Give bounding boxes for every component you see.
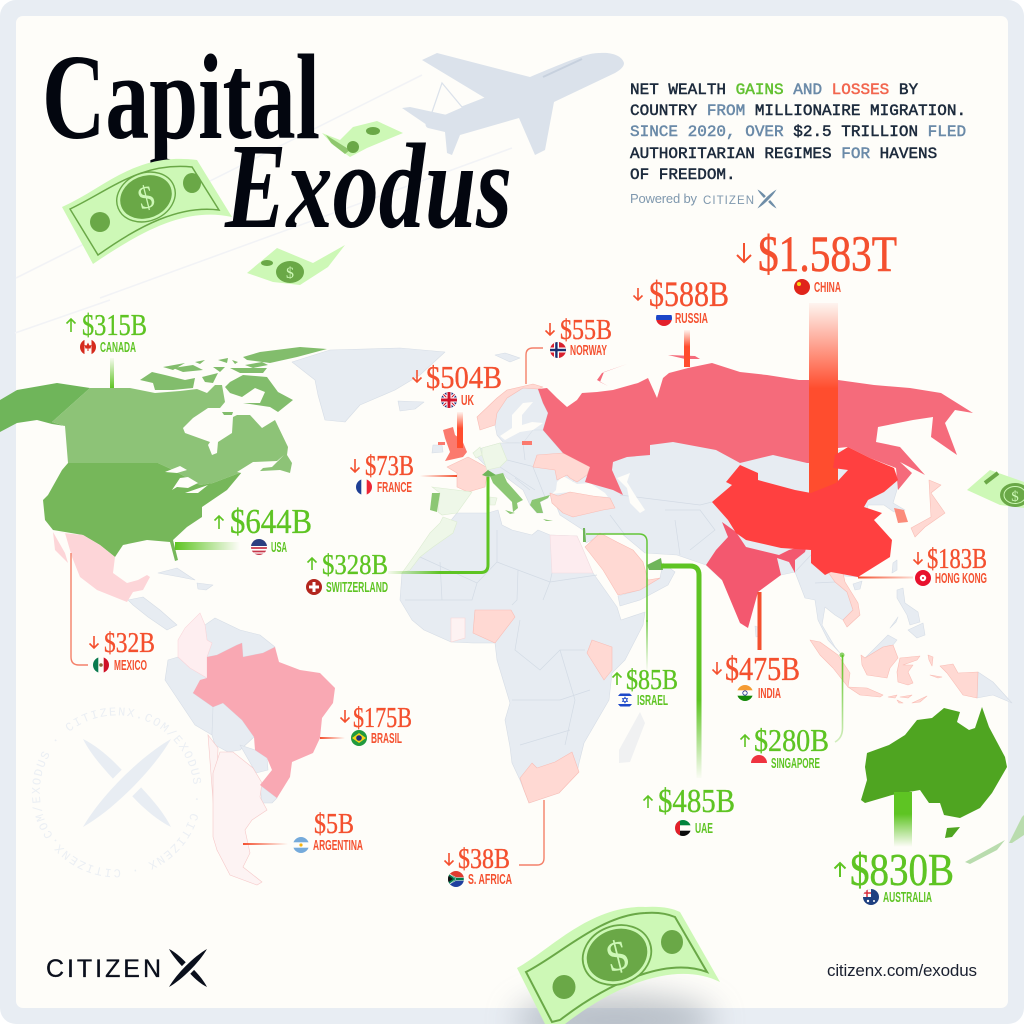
watermark: citizenx seal: CITIZENX.COM/EXODUS · CITIZENX · CITIZENX.COM/EXODUS ·: [32, 708, 201, 878]
label: Australia: $830B: [850, 844, 954, 895]
line: Israel: [586, 534, 647, 622]
label: Israel: $85B: [626, 664, 678, 696]
label: USA: [214, 507, 311, 555]
line: Singapore: [835, 655, 842, 742]
label: USA: $644B: [230, 502, 312, 541]
text block: description: NET WEALTH GAINS AND LOSSES BY: [630, 81, 918, 99]
map: grey countries: [128, 348, 1012, 803]
line: Norway: [526, 348, 543, 384]
map: Australia: [861, 707, 1007, 818]
title: [42, 30, 512, 254]
line: India: [758, 592, 762, 650]
label: Switzerland: $328B: [322, 549, 388, 581]
label: UK: [412, 364, 501, 408]
map: South Korea: [894, 508, 908, 523]
map: north america: [0, 347, 327, 602]
label: Israel: ISRAEL: [637, 693, 668, 709]
icon: airplane: [402, 53, 624, 155]
label: Israel: [612, 668, 677, 706]
label: South Africa: [444, 844, 512, 888]
line: Canada: [110, 358, 114, 388]
line: UAE tail: [696, 700, 702, 778]
label: India: [712, 655, 799, 701]
map: Russia: [538, 363, 809, 495]
label: Norway: NORWAY: [570, 343, 607, 359]
label: China: CHINA: [814, 280, 841, 296]
label: China: $1.583T: [758, 227, 897, 283]
line: UAE: [661, 566, 699, 700]
label: South Africa: $38B: [458, 844, 510, 875]
line: Russia: [684, 330, 690, 367]
label: South Africa: S. AFRICA: [468, 872, 512, 888]
text block: description: COUNTRY FROM MILLIONAIRE MIGRATION.: [630, 102, 966, 120]
label: Argentina: [294, 812, 363, 853]
label: Norway: $55B: [560, 314, 612, 346]
map: Tasmania: [945, 827, 960, 838]
label: Australia: [834, 852, 952, 905]
label: UK: UK: [461, 393, 474, 409]
label: Norway: [545, 318, 611, 358]
line: South Africa: [519, 800, 544, 865]
icon: dollar bill large: [62, 159, 232, 264]
label: UK: $504B: [426, 359, 502, 395]
label: Russia: $588B: [649, 274, 729, 314]
label: Russia: [633, 280, 728, 326]
label: Hong Kong: [914, 544, 987, 587]
logo: CitizenX: CITIZEN: [46, 955, 161, 983]
text block: description: OF FREEDOM.: [630, 166, 736, 184]
line: UK: [457, 412, 463, 448]
label: India: $475B: [725, 651, 800, 688]
icon: dollar bill curled bottom: [247, 245, 345, 285]
label: Canada: [66, 312, 146, 354]
map: China: [712, 447, 898, 577]
line: France: [420, 475, 457, 477]
icon: dollar bill curled bottom: $: [286, 265, 294, 282]
powered by logo: Powered by: [630, 191, 698, 206]
label: Switzerland: [306, 553, 388, 595]
label: Hong Kong: $183B: [927, 544, 987, 575]
label: France: [350, 454, 413, 494]
line: Switzerland: [388, 477, 488, 572]
label: Brasil: [340, 706, 412, 746]
label: Argentina: ARGENTINA: [313, 838, 363, 854]
label: Argentina: $5B: [314, 808, 354, 840]
label: Brasil: BRASIL: [371, 731, 402, 747]
map: New Zealand: [965, 815, 1024, 864]
shadow under bottom bill: [515, 994, 715, 1024]
icon: dollar bill large: $: [134, 178, 158, 216]
powered by logo: [630, 190, 776, 208]
label: UAE: UAE: [695, 821, 713, 837]
label: Singapore: $280B: [754, 722, 829, 758]
beam: China: [809, 303, 838, 493]
label: UAE: $485B: [658, 783, 735, 820]
map: India: [706, 522, 807, 628]
icon: dollar bill bottom: $: [602, 932, 633, 982]
label: Singapore: SINGAPORE: [771, 756, 820, 772]
text block: description: AUTHORITARIAN REGIMES FOR HAVENS: [630, 145, 937, 163]
line: Mexico: [71, 553, 88, 665]
label: Mexico: [89, 631, 154, 672]
beam: Australia: [894, 792, 912, 847]
map: pale pink countries: [447, 384, 978, 803]
label: Canada: CANADA: [100, 340, 136, 356]
text block: description: SINCE 2020, OVER $2.5 TRILLION FLED: [630, 123, 966, 141]
world map: [0, 303, 1024, 885]
label: France: FRANCE: [377, 480, 412, 496]
label: Australia: AUSTRALIA: [883, 890, 932, 906]
line: Israel tail: [646, 620, 648, 672]
label: Hong Kong: HONG KONG: [935, 571, 987, 587]
title: Exodus: [224, 119, 512, 254]
icon: dollar bill small top: [322, 121, 403, 157]
seas: [500, 402, 653, 566]
label: Singapore: [740, 728, 828, 768]
logo: CitizenX: [46, 949, 207, 987]
line: Brasil: [320, 737, 345, 739]
label: Canada: $315B: [82, 308, 147, 342]
leader lines: [71, 330, 913, 865]
map: green countries in Europe and Middle East: [430, 470, 844, 658]
map: pale green countries: [402, 443, 507, 573]
label: Mexico: $32B: [104, 627, 155, 659]
map: south america: [178, 613, 335, 885]
powered by logo: CITIZEN: [703, 195, 754, 207]
line: Hong Kong: [858, 576, 913, 578]
label: Russia: RUSSIA: [675, 311, 708, 327]
icon: dollar bill right edge: [967, 470, 1024, 508]
label: Mexico: MEXICO: [114, 658, 147, 674]
title: Capital: [42, 30, 320, 165]
icon: dollar bill bottom: [517, 907, 720, 1024]
line: USA: [175, 542, 240, 550]
label: France: $73B: [365, 451, 414, 482]
website url: citizenx.com/exodus: [827, 961, 977, 980]
label: UAE: [644, 783, 735, 837]
label: USA: USA: [271, 540, 287, 556]
text block: description: [630, 81, 966, 184]
label: Brasil: $175B: [353, 702, 412, 734]
label: Switzerland: SWITZERLAND: [326, 580, 388, 596]
label: India: INDIA: [758, 686, 781, 702]
icon: dollar bill right edge: $: [1011, 489, 1019, 505]
map: UK: [443, 427, 467, 461]
decorative borders: [405, 443, 835, 745]
line: Argentina: [243, 843, 288, 845]
label: China: [736, 234, 897, 295]
